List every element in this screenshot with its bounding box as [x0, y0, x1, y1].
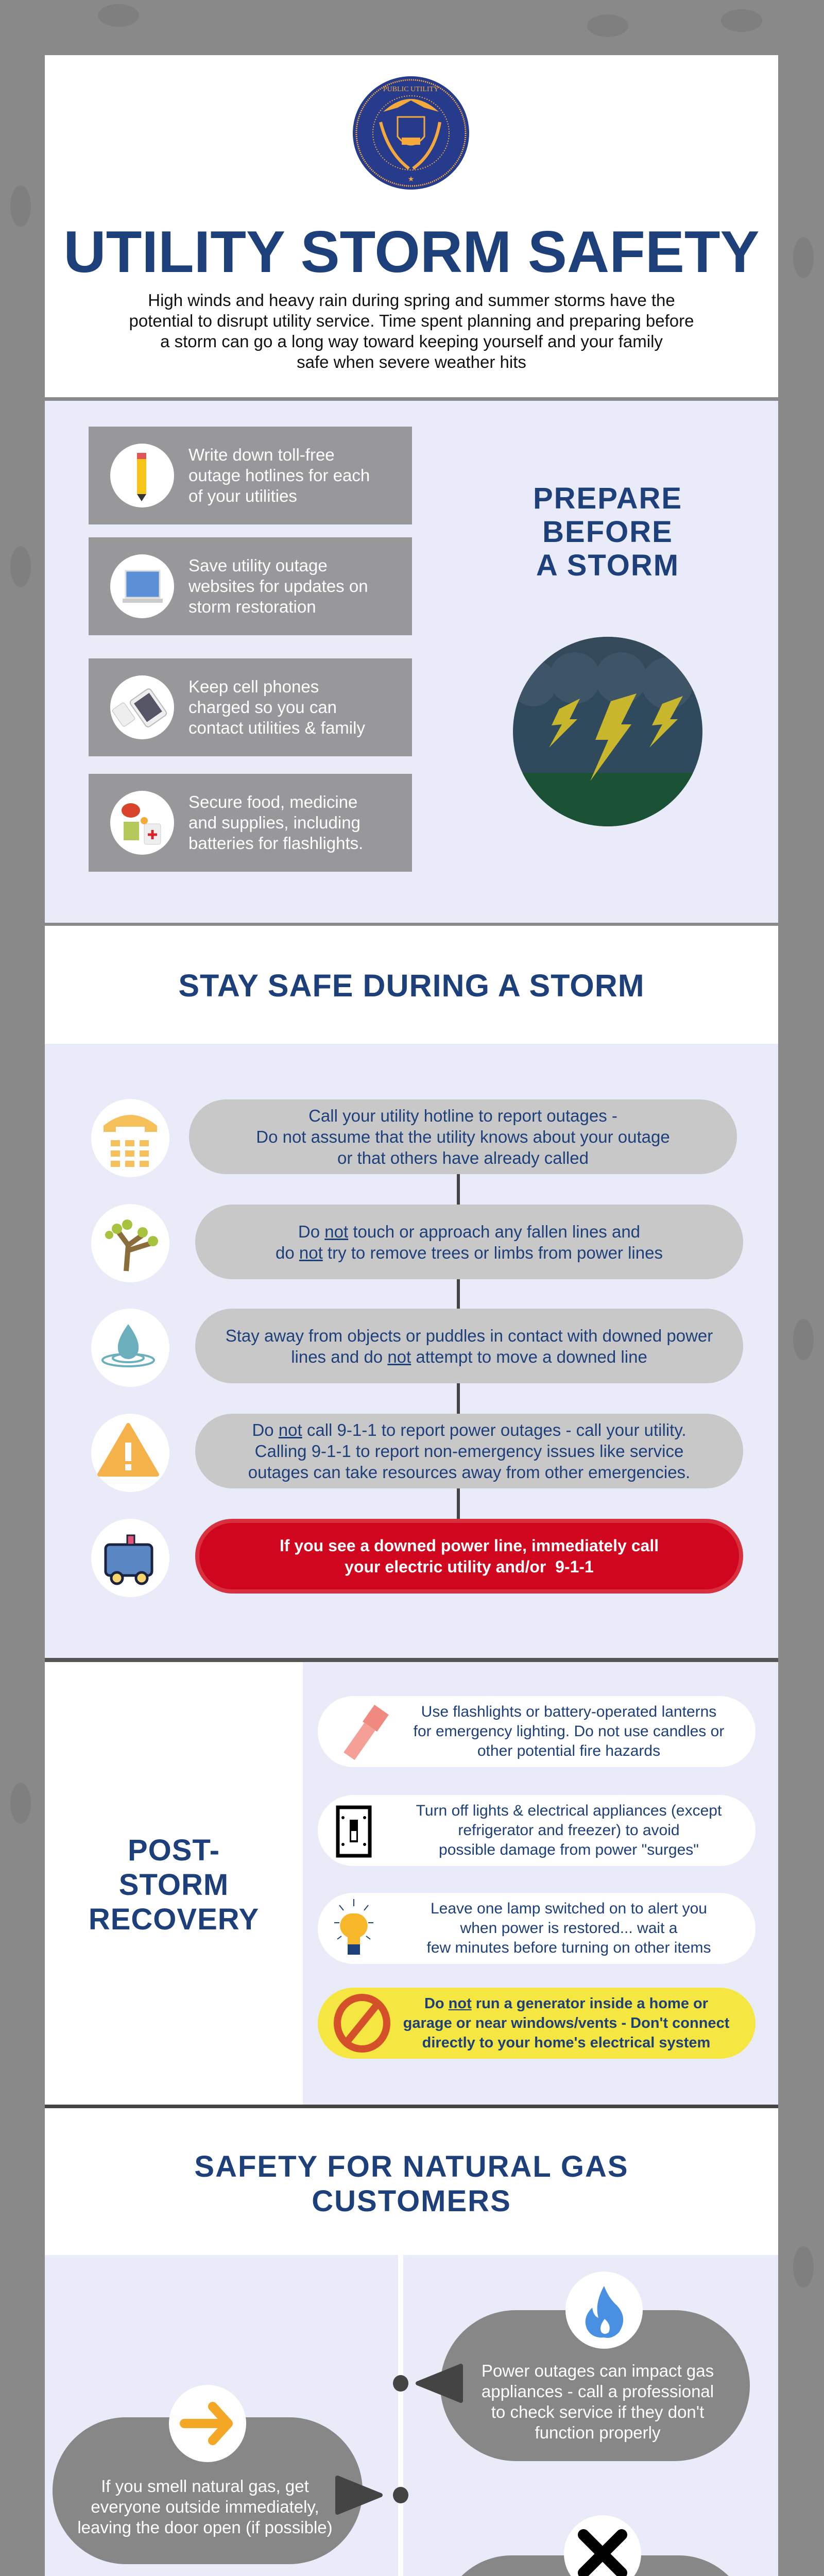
bubble: do not use phones — [440, 2555, 750, 2576]
heading: natural gas: CUSTOMERS — [312, 2184, 511, 2218]
card: hotlines: Write down toll-free — [188, 445, 335, 464]
icon: tree — [91, 1204, 169, 1282]
pill: puddles: Stay away from objects or puddles in contact with downed power — [226, 1326, 713, 1345]
heading: prepare before a storm — [533, 482, 682, 582]
card: phones: charged so you can — [188, 698, 337, 717]
pill: call utility — [189, 1099, 737, 1174]
intro text: a storm can go a long way toward keeping yourself and your family — [160, 332, 663, 351]
heading: prepare before a storm: BEFORE — [542, 515, 673, 549]
pill: fallen lines: Do not touch or approach any fallen lines and — [298, 1222, 640, 1241]
pill: red alert: your electric utility and/or 9-1-1 — [345, 1557, 594, 1575]
bubble: smell gas: everyone outside immediately, — [91, 2497, 319, 2516]
card: websites: Save utility outage — [188, 556, 328, 575]
pointer: flame bubble — [416, 2364, 463, 2403]
icon: phones — [110, 675, 174, 739]
icon: ambulance — [91, 1519, 169, 1597]
pill: do not call 911: Calling 9-1-1 to report non-emergency issues like service — [255, 1442, 683, 1461]
card: turn off lights: Turn off lights & electrical appliances (except — [416, 1802, 722, 1819]
pill: do not call 911: Do not call 9-1-1 to report power outages - call your utility. — [252, 1420, 686, 1439]
icon: laptop — [110, 554, 174, 618]
panel: post-storm recovery — [45, 1662, 303, 2105]
icon: warning — [91, 1414, 169, 1492]
panel: prepare before a storm — [45, 401, 778, 923]
card: websites: websites for updates on — [188, 577, 368, 596]
icon: flame — [565, 2272, 643, 2349]
card: turn off lights: possible damage from power "surges" — [439, 1841, 699, 1858]
pill: puddles: lines and do not attempt to move a downed line — [291, 1347, 647, 1366]
icon: telephone — [91, 1099, 169, 1177]
panel: natural gas — [45, 2108, 778, 2255]
heading: post-storm recovery: POST- — [128, 1834, 220, 1867]
card: supplies — [89, 774, 412, 872]
pill: call utility: Call your utility hotline to report outages - — [308, 1106, 617, 1125]
icon: light bulb — [334, 1899, 373, 1955]
icon: PUC seal logo — [353, 76, 469, 190]
card: flashlights: Use flashlights or battery-operated lanterns — [421, 1703, 716, 1720]
heading: natural gas — [194, 2150, 629, 2218]
card: supplies: Secure food, medicine — [188, 792, 357, 811]
card: websites — [89, 537, 412, 635]
intro text: potential to disrupt utility service. Time spent planning and preparing before — [129, 311, 694, 330]
pill: do not call 911: outages can take resources away from other emergencies. — [248, 1463, 690, 1482]
card: hotlines: outage hotlines for each — [188, 466, 370, 485]
card: lamp: when power is restored... wait a — [460, 1920, 677, 1937]
card: websites: storm restoration — [188, 597, 316, 616]
card: turn off lights: refrigerator and freezer) to avoid — [458, 1822, 680, 1839]
pill: puddles — [195, 1309, 743, 1383]
card: generator warning: Do not run a generator inside a home or — [424, 1995, 708, 2012]
card: supplies: and supplies, including — [188, 813, 360, 832]
icon: prohibited — [334, 1994, 390, 2053]
bubble: power outages — [440, 2310, 750, 2461]
bubble: power outages: appliances - call a professional — [482, 2382, 714, 2401]
icon: X mark — [564, 2515, 641, 2576]
icon: water drop — [91, 1309, 169, 1387]
card: flashlights: other potential fire hazards — [477, 1742, 660, 1759]
card: supplies: batteries for flashlights. — [188, 834, 363, 853]
card: flashlights: for emergency lighting. Do not use candles or — [414, 1723, 724, 1740]
icon: pencil — [110, 444, 174, 507]
heading: post-storm recovery: RECOVERY — [89, 1903, 259, 1936]
card: phones — [89, 658, 412, 756]
intro text: High winds and heavy rain during spring and summer storms have the — [148, 291, 675, 310]
card: generator warning: garage or near windows/vents - Don't connect — [403, 2015, 729, 2031]
heading: post-storm recovery: STORM — [119, 1868, 229, 1902]
bubble: smell gas — [53, 2417, 363, 2564]
pill: red alert — [195, 1519, 743, 1594]
pill: red alert: If you see a downed power line, immediately call — [280, 1536, 659, 1555]
card: phones: contact utilities & family — [188, 718, 365, 737]
dot — [393, 2487, 408, 2503]
intro text — [129, 291, 694, 371]
title: UTILITY STORM SAFETY — [63, 219, 760, 285]
intro text: safe when severe weather hits — [297, 352, 526, 371]
card: turn off lights — [318, 1795, 756, 1866]
pill: fallen lines: do not try to remove trees or limbs from power lines — [276, 1243, 663, 1262]
card: lamp — [318, 1893, 756, 1964]
bubble: power outages: function properly — [535, 2423, 660, 2442]
pill: do not call 911 — [195, 1414, 743, 1488]
pill: call utility: or that others have already called — [337, 1148, 589, 1167]
card: hotlines: of your utilities — [188, 486, 297, 505]
bubble: smell gas: If you smell natural gas, get — [101, 2477, 309, 2496]
icon: storm illustration — [513, 637, 702, 826]
bubble: power outages: Power outages can impact gas — [482, 2361, 714, 2380]
icon: flashlight — [344, 1705, 389, 1760]
panel: stay safe during a storm — [45, 926, 778, 1044]
card: hotlines — [89, 427, 412, 524]
connector line — [457, 1170, 460, 1530]
icon: PUC seal logo: PUBLIC UTILITY — [383, 86, 439, 93]
card: flashlights — [318, 1696, 756, 1767]
bubble: power outages: to check service if they don't — [491, 2402, 704, 2421]
pill: call utility: Do not assume that the utility knows about your outage — [256, 1127, 670, 1146]
pill: fallen lines — [195, 1205, 743, 1279]
icon: PUC seal logo: ★ — [408, 175, 414, 183]
timeline line — [398, 2255, 403, 2576]
bubble: smell gas: leaving the door open (if possible) — [77, 2518, 333, 2537]
icon: switch — [336, 1805, 372, 1858]
heading: prepare before a storm: PREPARE — [533, 482, 682, 515]
heading: prepare before a storm: A STORM — [536, 549, 679, 582]
heading: post-storm recovery — [89, 1834, 259, 1936]
card: phones: Keep cell phones — [188, 677, 319, 696]
card: generator warning: directly to your home's electrical system — [422, 2035, 710, 2051]
pointer: smell gas — [335, 2476, 383, 2515]
card: lamp: Leave one lamp switched on to alert you — [431, 1900, 707, 1917]
icon: supplies — [110, 791, 174, 855]
dot — [393, 2375, 408, 2392]
heading: stay safe during a storm: STAY SAFE DURING A STORM — [178, 968, 645, 1003]
card: lamp: few minutes before turning on other items — [427, 1939, 711, 1956]
heading: natural gas: SAFETY FOR NATURAL GAS — [194, 2150, 629, 2183]
card: generator warning — [318, 1988, 756, 2059]
panel: header — [45, 55, 778, 397]
icon: arrow — [169, 2385, 246, 2462]
